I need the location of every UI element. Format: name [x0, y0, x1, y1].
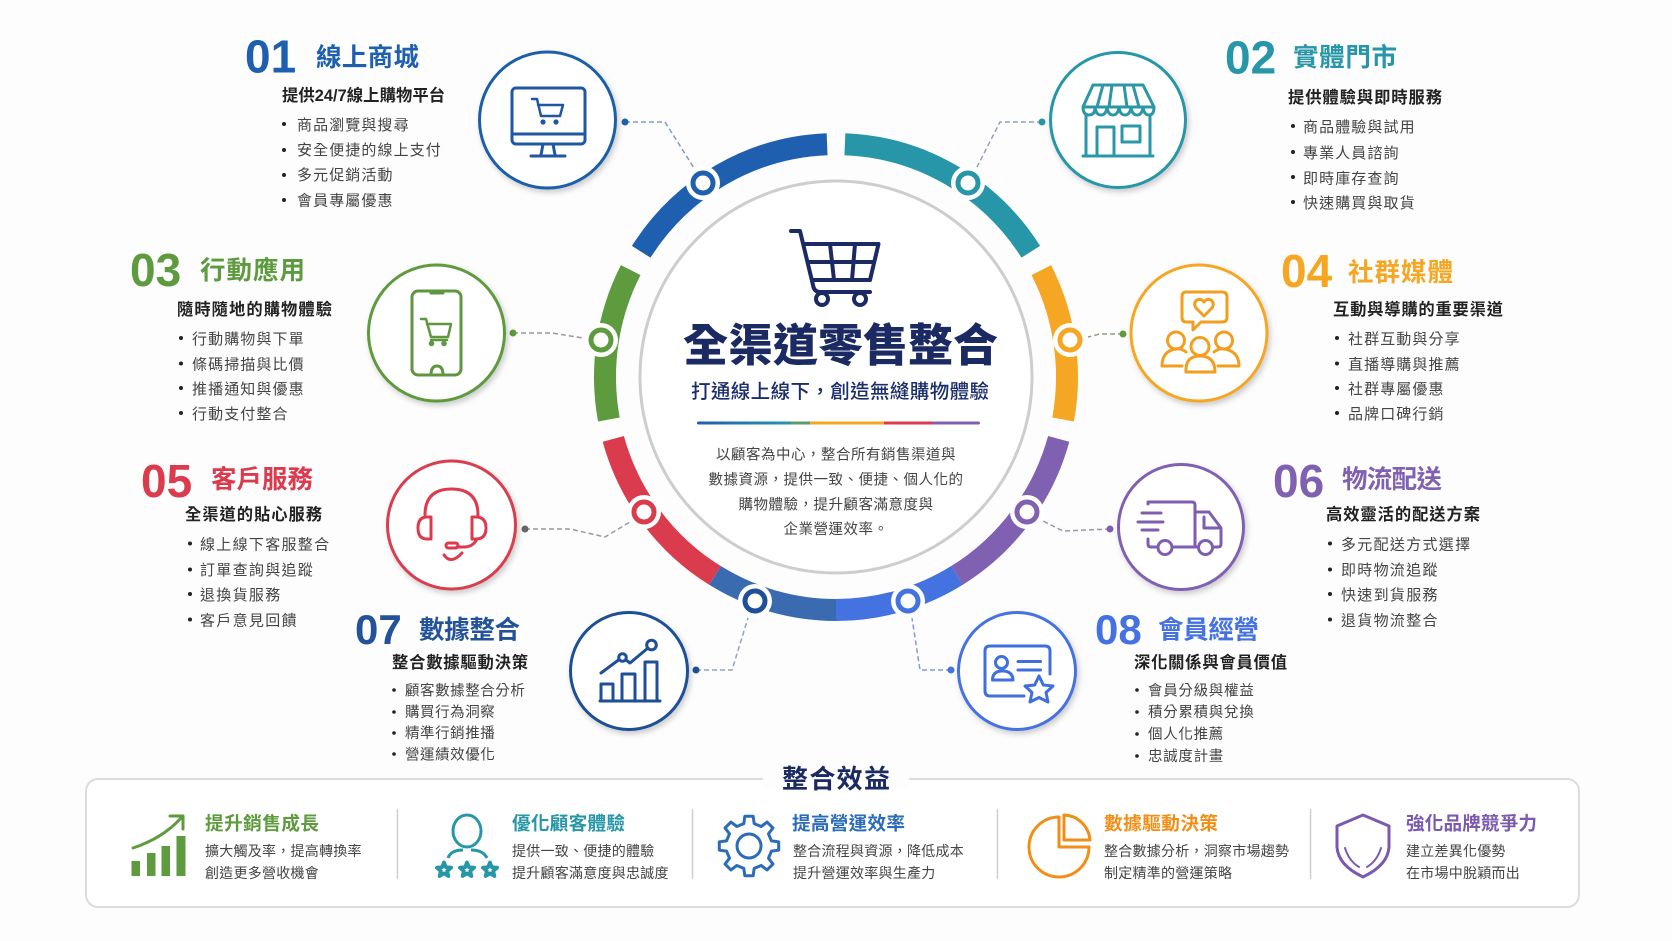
panel: 02 physical store [1050, 32, 1442, 212]
list 07: 顧客數據整合分析 [405, 682, 525, 700]
connector 02 [977, 118, 1046, 167]
list 02 [1291, 119, 1416, 212]
heading 08: 會員經營 [1158, 616, 1259, 644]
list 06: 即時物流追蹤 [1341, 562, 1439, 579]
node 07 [738, 584, 772, 618]
benefit 2: customer experience: 提供一致、便捷的體驗 [512, 843, 654, 859]
panel: integration benefits [86, 764, 1579, 907]
icon: pie chart [1029, 815, 1090, 877]
node 01 [686, 166, 720, 200]
heading 03: 行動應用 [200, 256, 305, 285]
list 05: 訂單查詢與追蹤 [200, 562, 314, 579]
heading 05 [141, 455, 313, 507]
ring segment 02 [845, 144, 1031, 252]
subheading 08: 深化關係與會員價值 [1134, 653, 1287, 672]
icon: center shopping cart [791, 231, 878, 305]
list 01: 多元促銷活動 [297, 166, 394, 184]
panel: 01 online mall [245, 30, 616, 210]
benefit 3: operational efficiency [719, 813, 964, 881]
list 02: 快速購買與取貨 [1303, 194, 1416, 212]
heading 01: 線上商城 [316, 43, 419, 72]
list 08 [1135, 682, 1254, 765]
icon: shield [1337, 815, 1389, 877]
list 01 [282, 117, 442, 210]
connector 04 [1088, 330, 1126, 338]
icon: rising bars [132, 816, 186, 876]
heading 02 [1225, 32, 1397, 84]
main title: 全渠道零售整合 [683, 320, 998, 371]
node 05 [627, 495, 661, 529]
icon: headset [388, 461, 516, 589]
benefit 3: operational efficiency: 提升營運效率與生產力 [793, 865, 936, 881]
benefit 3: operational efficiency: 整合流程與資源，降低成本 [793, 843, 964, 859]
list 02: 專業人員諮詢 [1303, 145, 1400, 162]
list 03: 行動支付整合 [192, 406, 289, 423]
benefit 5: brand competitiveness [1337, 813, 1537, 881]
benefit 4: data-driven decisions: 整合數據分析，洞察市場趨勢 [1104, 843, 1289, 859]
node 02 [951, 166, 985, 200]
list 03: 推播通知與優惠 [192, 380, 305, 398]
heading 04: 04 [1281, 245, 1333, 297]
ring: segmented colour ring [605, 144, 1067, 610]
list 02: 商品體驗與試用 [1303, 119, 1416, 136]
subheading 04: 互動與導購的重要渠道 [1333, 300, 1503, 319]
list 04: 社群專屬優惠 [1348, 380, 1445, 398]
panel: 04 social media [1131, 245, 1503, 423]
list 04: 品牌口碑行銷 [1348, 406, 1445, 423]
benefit 5: brand competitiveness: 強化品牌競爭力 [1406, 813, 1537, 834]
node 06 [1010, 495, 1044, 529]
center description: 企業營運效率。 [784, 520, 888, 538]
list 02: 即時庫存查詢 [1303, 170, 1400, 188]
subheading 03: 隨時隨地的購物體驗 [177, 300, 332, 319]
icon: gear [719, 816, 779, 876]
heading: benefits: 整合效益 [782, 764, 890, 794]
heading 04 [1281, 245, 1453, 297]
list 01: 會員專屬優惠 [297, 192, 394, 210]
panel: 05 customer service [141, 455, 516, 630]
benefit 2: customer experience [437, 813, 669, 881]
benefit 1: sales growth: 提升銷售成長 [205, 813, 319, 834]
benefit 4: data-driven decisions [1029, 813, 1289, 881]
list 06 [1328, 536, 1471, 630]
list 04: 社群互動與分享 [1348, 331, 1461, 348]
panel: 08 membership [958, 606, 1287, 765]
benefit 1: sales growth: 擴大觸及率，提高轉換率 [205, 843, 362, 859]
benefit 1: sales growth: 創造更多營收機會 [205, 865, 319, 881]
connector 01 [622, 118, 694, 168]
connector 06 [1043, 521, 1114, 532]
heading 07: 數據整合 [419, 616, 520, 644]
list 04 [1335, 331, 1461, 423]
icon: community with heart [1131, 265, 1267, 401]
list 08: 個人化推薦 [1148, 726, 1224, 743]
ring segment 06 [957, 439, 1059, 575]
center description [708, 446, 964, 538]
center circle [640, 181, 1032, 573]
connector 05 [522, 522, 630, 537]
icon: monitor with cart [480, 52, 616, 188]
subheading 06: 高效靈活的配送方案 [1326, 505, 1480, 524]
center description: 以顧客為中心，整合所有銷售渠道與 [716, 446, 956, 464]
heading 06 [1273, 455, 1442, 507]
heading 02: 02 [1225, 32, 1276, 84]
ring nodes [584, 166, 1087, 618]
heading 08: 08 [1095, 606, 1142, 653]
benefit 3: operational efficiency: 提高營運效率 [792, 813, 905, 834]
list 03: 行動購物與下單 [192, 331, 305, 348]
list 05 [188, 536, 330, 630]
list 08: 積分累積與兌換 [1148, 704, 1254, 721]
ring segment 08 [836, 575, 957, 610]
heading 07: 07 [355, 606, 402, 653]
heading 08 [1095, 606, 1259, 653]
subheading 01: 提供24/7線上購物平台 [282, 86, 445, 105]
heading 05: 05 [141, 455, 192, 507]
node 08 [891, 584, 925, 618]
icon: member card with star [958, 612, 1076, 730]
icon: smartphone with cart [368, 265, 504, 401]
ring segment 03 [605, 270, 631, 420]
icon: store [1050, 52, 1186, 188]
heading 05: 客戶服務 [211, 465, 313, 494]
heading 03 [130, 244, 305, 296]
icon: delivery truck [1118, 464, 1244, 590]
heading 01 [245, 30, 419, 82]
heading 03: 03 [130, 244, 181, 296]
list 06: 快速到貨服務 [1341, 586, 1439, 604]
list 07: 精準行銷推播 [405, 725, 495, 742]
icon: growth chart [570, 612, 688, 730]
list 06: 多元配送方式選擇 [1341, 536, 1471, 554]
panel: 07 data integration [355, 606, 688, 764]
benefit 4: data-driven decisions: 制定精準的營運策略 [1104, 865, 1232, 881]
list 07: 購買行為洞察 [405, 703, 495, 721]
panel: 06 logistics [1118, 455, 1480, 630]
list 05: 客戶意見回饋 [200, 612, 298, 630]
list 03 [179, 331, 305, 423]
subheading 02: 提供體驗與即時服務 [1288, 88, 1442, 107]
center description: 數據資源，提供一致、便捷、個人化的 [708, 472, 964, 488]
heading 01: 01 [245, 30, 296, 82]
subheading 07: 整合數據驅動決策 [392, 653, 528, 672]
connectors [510, 118, 1126, 674]
heading 06: 物流配送 [1342, 466, 1442, 494]
list 03: 條碼掃描與比價 [192, 356, 305, 374]
heading 02: 實體門市 [1293, 44, 1397, 72]
list 05: 退換貨服務 [200, 586, 282, 604]
node 03 [584, 323, 618, 357]
panel: 03 mobile app [130, 244, 504, 423]
list 04: 直播導購與推薦 [1348, 356, 1461, 374]
ring segment 07 [715, 575, 836, 610]
connector 08 [912, 618, 954, 674]
benefit 5: brand competitiveness: 在市場中脫穎而出 [1406, 865, 1520, 881]
benefit 2: customer experience: 提升顧客滿意度與忠誠度 [512, 865, 669, 881]
subheading 05: 全渠道的貼心服務 [185, 505, 322, 524]
list 08: 會員分級與權益 [1148, 682, 1254, 700]
ring segment 01 [641, 144, 827, 252]
list 01: 安全便捷的線上支付 [297, 142, 442, 159]
ring segment 04 [1041, 270, 1067, 420]
list 06: 退貨物流整合 [1341, 612, 1439, 630]
list 05: 線上線下客服整合 [200, 536, 330, 554]
heading 06: 06 [1273, 455, 1324, 507]
dividers [398, 809, 1310, 879]
icon: person with stars [437, 815, 497, 876]
connector 03 [510, 330, 583, 338]
benefit 4: data-driven decisions: 數據驅動決策 [1104, 813, 1218, 834]
list 07: 營運績效優化 [405, 746, 495, 764]
node 04 [1053, 323, 1087, 357]
gradient rule [697, 422, 980, 424]
benefit 2: customer experience: 優化顧客體驗 [512, 813, 625, 834]
connector 07 [692, 618, 748, 674]
heading 07 [355, 606, 520, 653]
ring segment 05 [613, 439, 715, 575]
benefit 1: sales growth [132, 813, 362, 881]
list 07 [392, 682, 525, 764]
subtitle: 打通線上線下，創造無縫購物體驗 [691, 380, 989, 403]
benefit 5: brand competitiveness: 建立差異化優勢 [1406, 843, 1506, 859]
center description: 購物體驗，提升顧客滿意度與 [738, 496, 934, 514]
list 08: 忠誠度計畫 [1148, 748, 1224, 765]
list 01: 商品瀏覽與搜尋 [297, 117, 410, 134]
heading 04: 社群媒體 [1348, 259, 1453, 287]
